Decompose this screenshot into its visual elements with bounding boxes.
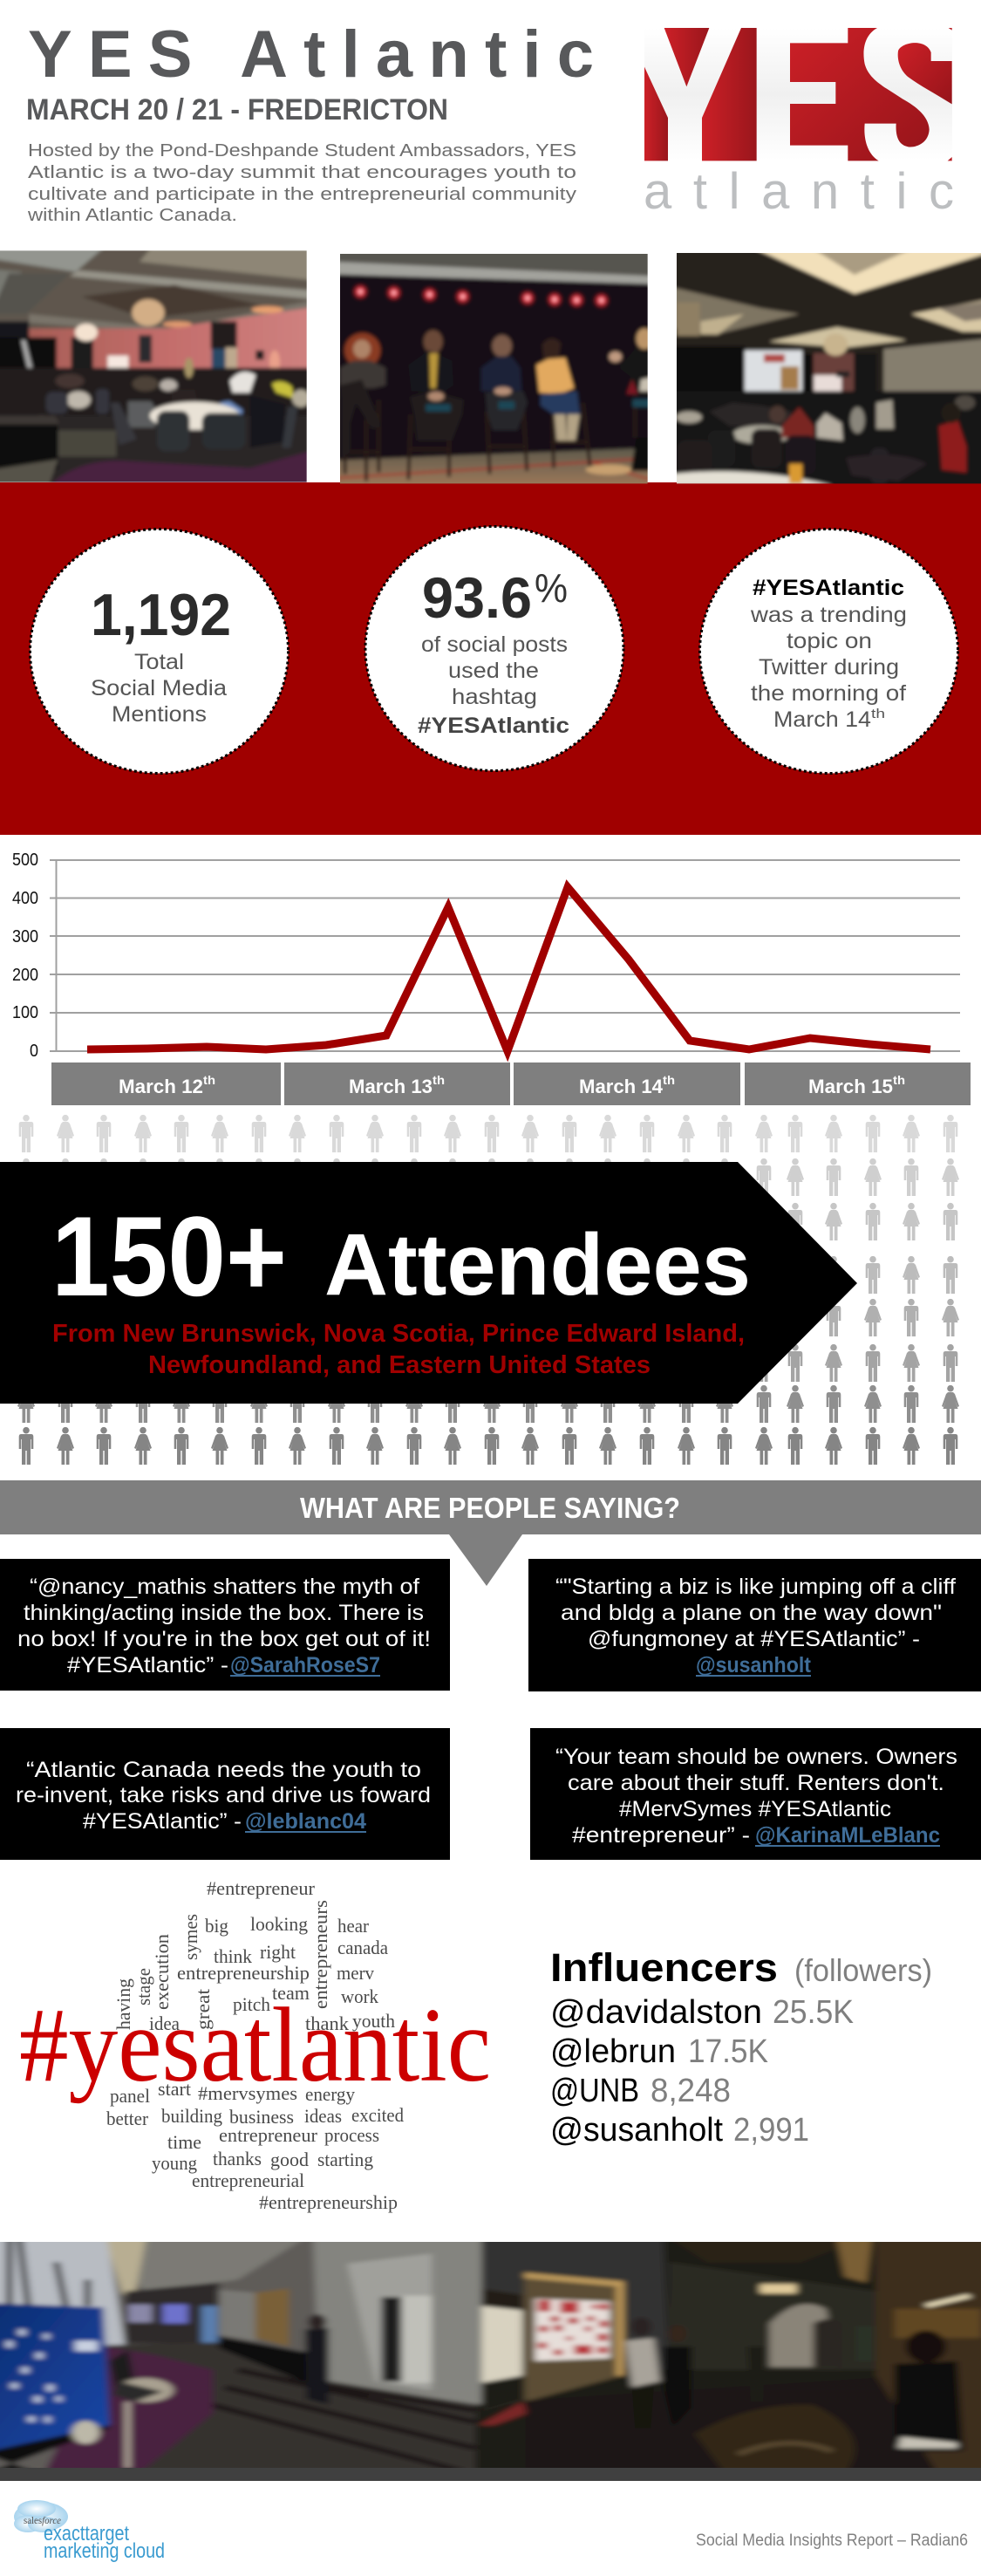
circle: trending topic: Twitter during bbox=[759, 655, 899, 680]
chart grid bbox=[50, 860, 960, 1051]
quote box 2: @fungmoney at #YESAtlantic” - bbox=[588, 1627, 920, 1651]
chart y axis labels: 400 bbox=[12, 889, 38, 908]
date axis bars: March 13 bbox=[349, 1076, 433, 1097]
word cloud: better bbox=[106, 2108, 149, 2129]
header text bbox=[26, 17, 594, 225]
circle: total mentions: Mentions bbox=[112, 702, 207, 727]
quote box 1 bbox=[0, 1559, 450, 1691]
chart y axis labels: 300 bbox=[12, 927, 38, 946]
quote box 1: thinking/acting inside the box. There is bbox=[24, 1601, 424, 1625]
quote box 4: #entrepreneur” - bbox=[572, 1823, 750, 1848]
quote box 1: #YESAtlantic” - bbox=[67, 1653, 228, 1677]
circle: total mentions: Social Media bbox=[91, 676, 227, 700]
date axis bars: th bbox=[893, 1073, 905, 1087]
word cloud: #entrepreneur bbox=[207, 1877, 316, 1899]
word cloud: ideas bbox=[304, 2105, 342, 2127]
circle: trending topic: topic on bbox=[787, 629, 872, 653]
word cloud: right bbox=[260, 1941, 296, 1963]
word cloud: big bbox=[205, 1915, 228, 1937]
word cloud: stage bbox=[133, 1968, 154, 2005]
quote box 3: #YESAtlantic” - bbox=[83, 1809, 242, 1834]
circle: trending topic: th bbox=[871, 707, 885, 721]
arrow: attendees callout: Newfoundland, and Eastern United States bbox=[148, 1351, 651, 1379]
word cloud: pitch bbox=[233, 1993, 270, 2015]
arrow: attendees callout: From New Brunswick, Nova Scotia, Prince Edward Island, bbox=[52, 1320, 745, 1348]
word cloud: energy bbox=[305, 2083, 355, 2105]
word cloud: #yesatlantic bbox=[19, 1986, 491, 2104]
word cloud: panel bbox=[110, 2085, 150, 2107]
word cloud: time bbox=[167, 2131, 201, 2153]
panel: statistics red band bbox=[0, 482, 981, 835]
influencers list bbox=[550, 1945, 932, 2149]
word cloud: great bbox=[192, 1989, 214, 2030]
word cloud: work bbox=[341, 1985, 378, 2007]
circle: trending topic: was a trending bbox=[750, 603, 907, 627]
word cloud: good bbox=[270, 2149, 309, 2170]
man 2 bbox=[424, 330, 443, 353]
date axis bars: March 14 bbox=[579, 1076, 664, 1097]
circle: trending topic: the morning of bbox=[751, 681, 906, 706]
word cloud: building bbox=[161, 2105, 222, 2127]
arrow: attendees callout: 150+ bbox=[51, 1192, 287, 1320]
word cloud: process bbox=[324, 2124, 379, 2146]
quote box 1: no box! If you're in the box get out of it! bbox=[17, 1627, 431, 1651]
word cloud: entrepreneur bbox=[219, 2124, 318, 2146]
influencers list: @UNB bbox=[550, 2073, 639, 2109]
quote box 2 bbox=[528, 1559, 981, 1691]
word cloud bbox=[19, 1877, 491, 2213]
word cloud: execution bbox=[151, 1934, 173, 2010]
quote box 4: care about their stuff. Renters don't. bbox=[568, 1771, 944, 1795]
description: cultivate and participate in the entrepreneurial community bbox=[28, 185, 576, 204]
description: within Atlantic Canada. bbox=[27, 206, 237, 225]
cloud icon bbox=[14, 2500, 68, 2532]
logo: salesforce exacttarget marketing cloud: marketing cloud bbox=[44, 2539, 165, 2563]
date and location: MARCH 20 / 21 - FREDERICTON bbox=[26, 93, 448, 126]
circle: hashtag share: % bbox=[535, 565, 568, 611]
quote box 3: re-invent, take risks and drive us foward bbox=[16, 1783, 431, 1807]
circle: hashtag share: #YESAtlantic bbox=[418, 714, 569, 738]
people pictogram grid bbox=[17, 1115, 959, 1465]
influencers list: @susanholt bbox=[550, 2112, 723, 2149]
quote box 3: @leblanc04 bbox=[245, 1809, 366, 1834]
arrow: attendees callout bbox=[0, 1162, 857, 1404]
quote box 2: “"Starting a biz is like jumping off a cliff bbox=[555, 1575, 956, 1599]
date axis bars bbox=[51, 1063, 971, 1105]
word cloud: entrepreneurs bbox=[310, 1900, 331, 2009]
date axis bars: th bbox=[203, 1073, 215, 1087]
chart y axis labels: 200 bbox=[12, 966, 38, 985]
word cloud: canada bbox=[337, 1937, 388, 1958]
quote box 3: “Atlantic Canada needs the youth to bbox=[26, 1758, 421, 1782]
arrow: attendees callout: Attendees bbox=[324, 1216, 751, 1314]
word cloud: idea bbox=[149, 2012, 180, 2034]
title: YES Atlantic bbox=[28, 17, 594, 92]
banner: what are people saying bbox=[0, 1480, 981, 1586]
quote box 4: #MervSymes #YESAtlantic bbox=[619, 1797, 891, 1821]
quote box 4 bbox=[530, 1728, 981, 1860]
word cloud: team bbox=[272, 1982, 310, 2004]
circle: hashtag share: hashtag bbox=[452, 685, 537, 709]
chart y axis labels bbox=[12, 851, 38, 1061]
footer dark strip bbox=[0, 2468, 981, 2481]
circle: trending topic: #YESAtlantic bbox=[753, 576, 904, 600]
quote box 2: and bldg a plane on the way down" bbox=[561, 1601, 942, 1625]
speaker right bbox=[637, 328, 652, 349]
circle: total mentions: 1,192 bbox=[91, 582, 231, 648]
quote box 1: “@nancy_mathis shatters the myth of bbox=[30, 1575, 419, 1599]
logo: salesforce exacttarget marketing cloud bbox=[14, 2500, 165, 2563]
line chart: social mentions by day bbox=[12, 851, 960, 1061]
banner: what are people saying: WHAT ARE PEOPLE SAYING? bbox=[300, 1492, 680, 1524]
circle: trending topic bbox=[699, 529, 957, 773]
word cloud: youth bbox=[352, 2010, 395, 2032]
circle: hashtag share: of social posts bbox=[421, 632, 568, 657]
circle: hashtag share: used the bbox=[448, 659, 539, 683]
word cloud: entrepreneurship bbox=[177, 1962, 310, 1984]
photo: ballroom with pink lights bbox=[0, 244, 317, 491]
man 3 bbox=[492, 335, 512, 357]
circle: total mentions: Total bbox=[134, 650, 184, 674]
word cloud: starting bbox=[317, 2149, 373, 2170]
woman left bbox=[344, 333, 380, 368]
chart y axis labels: 100 bbox=[12, 1003, 38, 1022]
word cloud: #mervsymes bbox=[198, 2082, 297, 2104]
chart y axis labels: 500 bbox=[12, 851, 38, 870]
stools bbox=[344, 400, 635, 482]
word cloud: merv bbox=[337, 1962, 374, 1984]
quote box 1: @SarahRoseS7 bbox=[230, 1653, 380, 1677]
influencers list: @davidalston bbox=[550, 1994, 762, 2031]
date axis bars: March 12 bbox=[119, 1076, 203, 1097]
word cloud: symes bbox=[180, 1914, 201, 1960]
date axis bars: th bbox=[433, 1073, 445, 1087]
logo: salesforce exacttarget marketing cloud: exacttarget bbox=[44, 2522, 129, 2545]
quote box 3 bbox=[0, 1728, 450, 1860]
photo: panorama of event foyer bbox=[0, 2233, 981, 2475]
circle: hashtag share bbox=[365, 527, 623, 771]
word cloud: thanks bbox=[213, 2148, 262, 2169]
chart y axis labels: 0 bbox=[30, 1042, 38, 1061]
circle: hashtag share: 93.6 bbox=[422, 565, 532, 630]
logo: salesforce exacttarget marketing cloud: salesforce bbox=[24, 2514, 62, 2526]
word cloud: excited bbox=[351, 2104, 404, 2126]
source credit: Social Media Insights Report – Radian6 bbox=[696, 2532, 968, 2550]
word cloud: start bbox=[158, 2078, 191, 2100]
description: Atlantic is a two-day summit that encourages youth to bbox=[28, 163, 576, 182]
logo: YES atlantic bbox=[644, 28, 954, 220]
influencers list: 17.5K bbox=[688, 2033, 768, 2070]
circle: total mentions bbox=[30, 529, 288, 773]
influencers list: 8,248 bbox=[651, 2073, 731, 2109]
word cloud: young bbox=[152, 2152, 197, 2174]
quote box 2: @susanholt bbox=[696, 1653, 812, 1677]
logo: YES atlantic: atlantic bbox=[644, 163, 954, 220]
date axis bars: March 15 bbox=[808, 1076, 893, 1097]
description bbox=[27, 141, 576, 225]
influencers list: @lebrun bbox=[550, 2033, 676, 2070]
influencers list: 2,991 bbox=[733, 2112, 809, 2149]
quote box 4: @KarinaMLeBlanc bbox=[755, 1823, 940, 1848]
date axis bars: th bbox=[663, 1073, 675, 1087]
influencers list: Influencers bbox=[550, 1945, 778, 1990]
word cloud: #entrepreneurship bbox=[259, 2191, 398, 2213]
influencers list: 25.5K bbox=[773, 1994, 854, 2031]
circle: trending topic: March 14 bbox=[773, 707, 871, 732]
word cloud: think bbox=[214, 1945, 252, 1967]
word cloud: thank bbox=[305, 2012, 349, 2034]
word cloud: looking bbox=[250, 1913, 308, 1935]
word cloud: business bbox=[229, 2106, 294, 2128]
photo: panel on stage bbox=[333, 247, 656, 489]
quote box 4: “Your team should be owners. Owners bbox=[555, 1745, 957, 1769]
woman 4 bbox=[541, 337, 562, 358]
chart data line bbox=[87, 887, 930, 1051]
description: Hosted by the Pond-Deshpande Student Ambassadors, YES bbox=[28, 141, 576, 161]
photo: ballroom with presentation screen bbox=[669, 246, 981, 490]
word cloud: having bbox=[112, 1978, 134, 2030]
word cloud: entrepreneurial bbox=[192, 2169, 304, 2191]
influencers list: (followers) bbox=[794, 1952, 932, 1988]
word cloud: hear bbox=[337, 1915, 370, 1937]
